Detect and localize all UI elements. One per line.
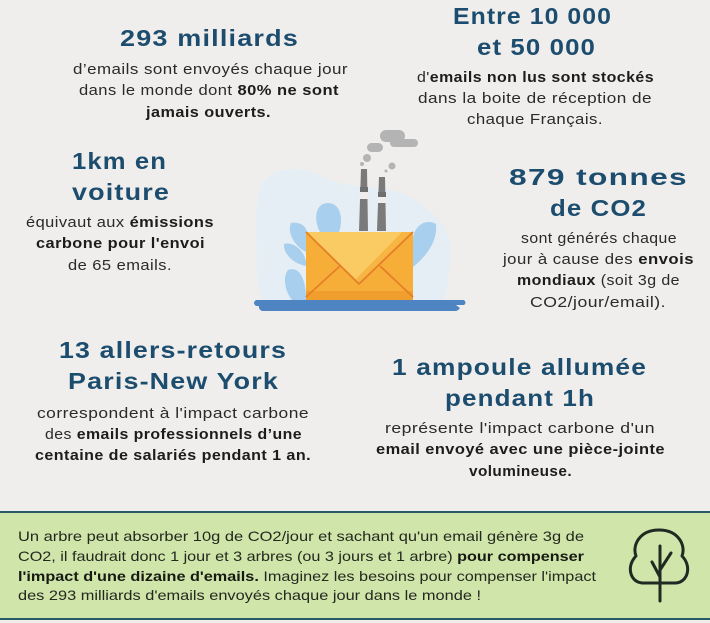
- text: unread emails: dans la boite de réception de: [418, 91, 652, 107]
- stat: 879 tonnes de CO2: [502, 164, 694, 311]
- text: CO2 per day: sont générés chaque: [521, 231, 677, 247]
- text: tree compensation: Un arbre peut absorber 10g de CO2/jour et sachant qu'un email génère 3g de: [18, 528, 584, 544]
- icon: blue ground: [254, 300, 466, 311]
- text: email with attachment: [376, 421, 665, 480]
- text: emails sent per day: jamais ouverts.: [145, 105, 271, 121]
- icon: leaves: [284, 203, 436, 300]
- text: carbon emissions equivalence: de 65 emails.: [68, 258, 172, 274]
- text: tree compensation: des 293 milliards d'emails envoyés chaque jour dans le monde !: [18, 587, 481, 603]
- stat: 293 milliards: [73, 25, 348, 121]
- text: carbon emissions equivalence: équivaut aux émissions: [26, 215, 214, 231]
- heading: 13 allers-retours Paris-New York: [59, 337, 287, 394]
- heading: 13 allers-retours Paris-New York: Paris-New York: [68, 368, 279, 394]
- heading: 879 tonnes de CO2: de CO2: [550, 195, 647, 221]
- icon: chimneys: [359, 169, 386, 231]
- heading: 13 allers-retours Paris-New York: 13 allers-retours: [59, 337, 287, 363]
- text: CO2 per day: [502, 231, 694, 311]
- stat: entre 10 000 et 50 000: [417, 3, 654, 128]
- heading: 1km en voiture: [72, 148, 170, 205]
- text: CO2 per day: mondiaux (soit 3g de: [517, 273, 680, 289]
- heading: 293 milliards: 293 milliards: [120, 25, 299, 51]
- stat: 1 ampoule allumée: [376, 354, 665, 480]
- heading: entre 10 000 et 50 000: et 50 000: [477, 34, 596, 60]
- heading: 1 ampoule allumée pendant 1h: pendant 1h: [445, 385, 595, 411]
- icon: tree: [630, 530, 688, 601]
- text: CO2 per day: CO2/jour/email).: [530, 295, 666, 311]
- text: email with attachment: représente l'impact carbone d'un: [385, 421, 655, 437]
- heading: 1 ampoule allumée pendant 1h: [392, 354, 647, 411]
- text: carbon emissions equivalence: [26, 215, 214, 274]
- heading: 879 tonnes de CO2: 879 tonnes: [509, 164, 688, 190]
- text: professional emails: [35, 406, 311, 464]
- text: professional emails: correspondent à l'impact carbone: [37, 406, 309, 422]
- text: tree compensation: [18, 528, 596, 603]
- text: CO2 per day: jour à cause des envois: [502, 252, 694, 268]
- text: professional emails: des emails professionnels d’une: [45, 427, 302, 443]
- text: carbon emissions equivalence: carbone pour l'envoi: [36, 236, 205, 252]
- text: emails sent per day: d’emails sont envoyés chaque jour: [73, 62, 348, 78]
- text: professional emails: centaine de salariés pendant 1 an.: [35, 448, 311, 464]
- icon: envelope: [306, 232, 413, 300]
- text: emails sent per day: [73, 62, 348, 121]
- panel: tree compensation banner: [0, 511, 710, 620]
- heading: entre 10 000 et 50 000: [453, 3, 612, 60]
- heading: 879 tonnes de CO2: [509, 164, 688, 221]
- heading: 1km en voiture: 1km en: [72, 148, 167, 174]
- heading: 1 ampoule allumée pendant 1h: 1 ampoule allumée: [392, 354, 647, 380]
- icon: smoke: [360, 130, 418, 172]
- text: unread emails: d'emails non lus sont stockés: [417, 70, 654, 86]
- stat: 1km en voiture: [26, 148, 214, 274]
- text: email with attachment: email envoyé avec une pièce-jointe: [376, 442, 665, 458]
- stat: 13 allers-retours: [35, 337, 311, 464]
- text: tree compensation: CO2, il faudrait donc 1 jour et 3 arbres (ou 3 jours et 1 arbre) pour compenser: [18, 548, 585, 564]
- text: email with attachment: volumineuse.: [469, 464, 572, 480]
- light blue blob: [255, 169, 451, 300]
- text: tree compensation: l'impact d'une dizaine d'emails. Imaginez les besoins pour compenser l'impact: [18, 568, 596, 584]
- text: unread emails: [417, 70, 654, 128]
- heading: 1km en voiture: voiture: [72, 179, 170, 205]
- text: unread emails: chaque Français.: [467, 112, 603, 128]
- illustration: envelope factory: [254, 130, 466, 311]
- heading: entre 10 000 et 50 000: Entre 10 000: [453, 3, 612, 29]
- text: emails sent per day: dans le monde dont 80% ne sont: [79, 83, 339, 99]
